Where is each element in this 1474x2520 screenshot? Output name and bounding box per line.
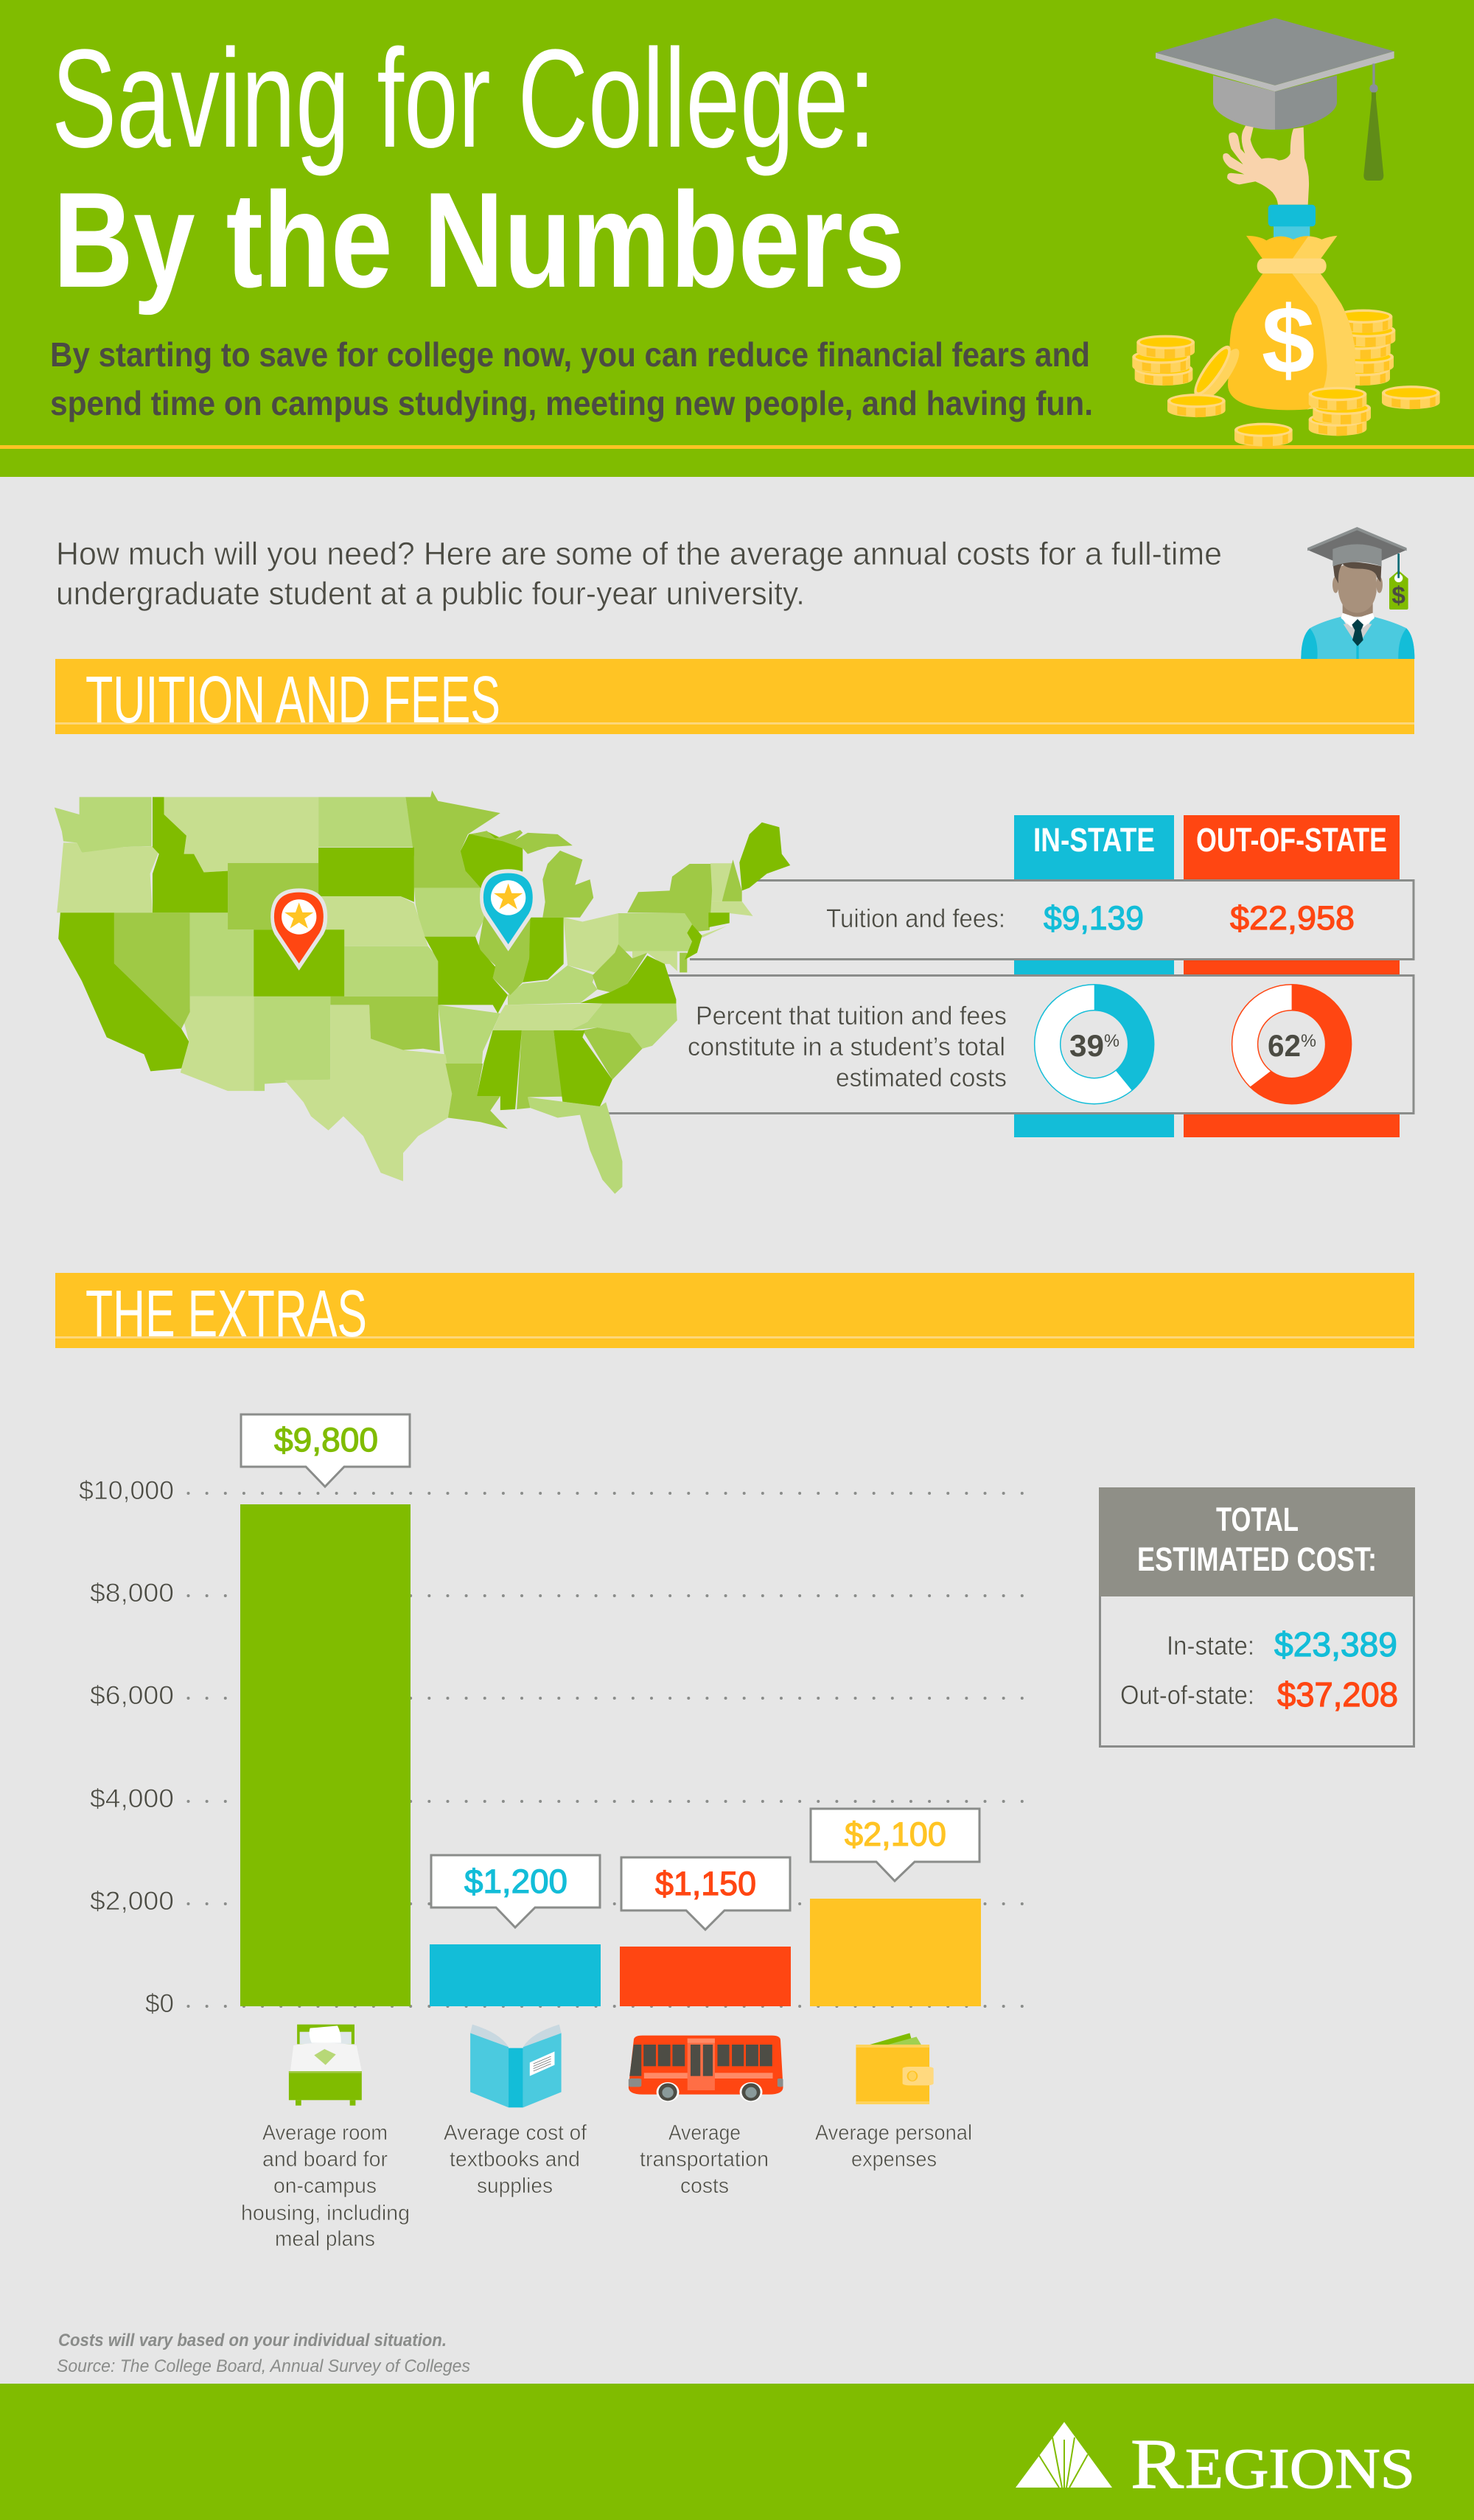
icon: left coin stack bbox=[1132, 335, 1195, 385]
intro text bbox=[56, 536, 1222, 612]
logo wordmark: R bbox=[1131, 2424, 1184, 2503]
icon: graduation cap, hand and money bag bbox=[1132, 18, 1440, 447]
icon: money bag bbox=[1228, 236, 1355, 410]
y axis labels: $4,000 bbox=[90, 1784, 174, 1813]
heading: tuition and fees: TUITION AND FEES bbox=[85, 663, 500, 737]
panel: tuition and fees row bbox=[690, 880, 1414, 960]
icon: coin stack behind bag bbox=[1332, 310, 1395, 385]
value: in-state tuition: $9,139 bbox=[1044, 899, 1144, 937]
donut chart: in-state 39%: % bbox=[1104, 1031, 1120, 1051]
callout: $1,150: $1,150 bbox=[655, 1865, 756, 1902]
subtitle: By starting to save for college now, you can reduce financial fears and bbox=[50, 335, 1090, 374]
callout: $1,200: $1,200 bbox=[464, 1863, 567, 1900]
value: out-of-state tuition: $22,958 bbox=[1230, 899, 1355, 937]
caption: room and board: and board for bbox=[262, 2148, 388, 2171]
intro text: undergraduate student at a public four-year university. bbox=[56, 576, 805, 612]
callout: $1,150 bbox=[621, 1857, 790, 1930]
caption: personal expenses: Average personal bbox=[815, 2121, 972, 2145]
icon: blue map pin bbox=[480, 869, 537, 952]
y axis labels: $0 bbox=[145, 1989, 174, 2018]
caption: room and board: Average room bbox=[262, 2121, 388, 2145]
callout: $9,800: $9,800 bbox=[274, 1421, 378, 1459]
caption: textbooks: textbooks and bbox=[450, 2148, 580, 2171]
caption: textbooks: Average cost of bbox=[444, 2121, 587, 2145]
caption: transportation bbox=[640, 2121, 769, 2198]
heading: TOTAL bbox=[1216, 1501, 1299, 1538]
caption: room and board: meal plans bbox=[275, 2227, 375, 2251]
icon: bed bbox=[289, 2025, 362, 2106]
title line 1: Saving for College: bbox=[52, 21, 876, 177]
label: Percent that tuition and fees bbox=[696, 1002, 1007, 1030]
icon: Regions logo mark bbox=[1016, 2422, 1112, 2488]
label: constitute in a student’s total bbox=[688, 1033, 1005, 1061]
in-state total: $23,389 bbox=[1274, 1625, 1397, 1664]
logo wordmark bbox=[1131, 2424, 1415, 2503]
icon: dollar sign on bag: $ bbox=[1262, 286, 1315, 394]
caption: personal expenses bbox=[815, 2121, 972, 2171]
caption: textbooks bbox=[444, 2121, 587, 2198]
callout: $9,800 bbox=[241, 1414, 410, 1487]
y axis labels: $6,000 bbox=[90, 1681, 174, 1710]
out-of-state total: Out-of-state: bbox=[1120, 1680, 1254, 1710]
footnote: Source: The College Board, Annual Survey of Colleges bbox=[57, 2356, 470, 2376]
bar: textbooks bbox=[430, 1944, 601, 2006]
heading: the extras bbox=[55, 1273, 1414, 1351]
heading bbox=[1137, 1501, 1377, 1578]
panel: total estimated cost bbox=[1099, 1487, 1415, 1747]
y axis labels: $10,000 bbox=[79, 1476, 174, 1505]
out-of-state total: $37,208 bbox=[1277, 1675, 1398, 1714]
label: estimated costs bbox=[836, 1064, 1007, 1092]
subtitle: spend time on campus studying, meeting new people, and having fun. bbox=[50, 384, 1093, 422]
heading: tuition and fees bbox=[55, 659, 1414, 737]
panel: footer bbox=[0, 2384, 1474, 2520]
intro text: How much will you need? Here are some of the average annual costs for a full-time bbox=[56, 536, 1222, 572]
caption: transportation: costs bbox=[680, 2174, 729, 2198]
logo wordmark: EGIONS bbox=[1185, 2437, 1415, 2500]
panel: out-of-state column bbox=[1184, 815, 1400, 1137]
icon: red map pin bbox=[270, 888, 327, 971]
caption: room and board bbox=[241, 2121, 410, 2251]
callout: $2,100 bbox=[811, 1809, 979, 1881]
bar chart: extras bbox=[79, 1414, 1024, 2018]
in-state total bbox=[1167, 1625, 1397, 1664]
callout: $2,100: $2,100 bbox=[845, 1815, 946, 1853]
heading: the extras: THE EXTRAS bbox=[85, 1277, 367, 1351]
label bbox=[688, 1002, 1007, 1092]
icon: wallet bbox=[856, 2033, 934, 2104]
icon: student with price tag bbox=[1301, 527, 1414, 659]
icon: graduation cap bbox=[1156, 18, 1394, 181]
panel: in-state column: IN-STATE bbox=[1033, 821, 1155, 859]
heading: ESTIMATED COST: bbox=[1137, 1540, 1377, 1578]
panel: header banner bbox=[0, 0, 1474, 477]
caption: room and board: on-campus bbox=[273, 2174, 377, 2198]
subtitle bbox=[50, 335, 1093, 422]
footnote: Costs will vary based on your individual situation. bbox=[58, 2331, 447, 2350]
caption: personal expenses: expenses bbox=[851, 2148, 937, 2171]
caption: transportation: Average bbox=[668, 2121, 741, 2145]
donut chart: out-of-state 62%: % bbox=[1301, 1031, 1316, 1051]
label: Tuition and fees: bbox=[826, 904, 1005, 933]
donut chart: out-of-state 62%: 62 bbox=[1268, 1028, 1301, 1063]
panel: in-state column bbox=[1014, 815, 1174, 1137]
icon: textbook bbox=[470, 2025, 562, 2107]
panel: out-of-state column: OUT-OF-STATE bbox=[1196, 821, 1387, 859]
caption: transportation: transportation bbox=[640, 2148, 769, 2171]
icon: bus bbox=[629, 2036, 783, 2102]
callout: $1,200 bbox=[431, 1855, 600, 1927]
donut chart: in-state 39%: 39 bbox=[1069, 1028, 1104, 1063]
icon: tilted coin bbox=[1190, 340, 1244, 405]
title line 2: By the Numbers bbox=[53, 164, 905, 315]
icon: sleeve bbox=[1268, 205, 1316, 242]
icon: student with price tag: $ bbox=[1391, 582, 1405, 610]
y axis labels: $2,000 bbox=[90, 1887, 174, 1916]
icon: scattered coins bbox=[1167, 385, 1440, 447]
caption: textbooks: supplies bbox=[477, 2174, 553, 2198]
y axis labels: $8,000 bbox=[90, 1579, 174, 1608]
in-state total: In-state: bbox=[1167, 1630, 1254, 1661]
out-of-state total bbox=[1120, 1675, 1398, 1714]
y axis labels bbox=[79, 1476, 174, 2018]
map: United States bbox=[55, 791, 790, 1194]
caption: room and board: housing, including bbox=[241, 2202, 410, 2225]
donut chart: out-of-state 62% bbox=[1232, 985, 1352, 1104]
footnote bbox=[57, 2331, 470, 2376]
bar: personal expenses bbox=[810, 1899, 981, 2006]
donut chart: in-state 39% bbox=[1035, 985, 1154, 1104]
bar: room and board bbox=[240, 1504, 411, 2006]
icon: hand bbox=[1223, 125, 1309, 205]
bar: transportation bbox=[620, 1947, 791, 2006]
panel: percent row bbox=[607, 975, 1414, 1114]
